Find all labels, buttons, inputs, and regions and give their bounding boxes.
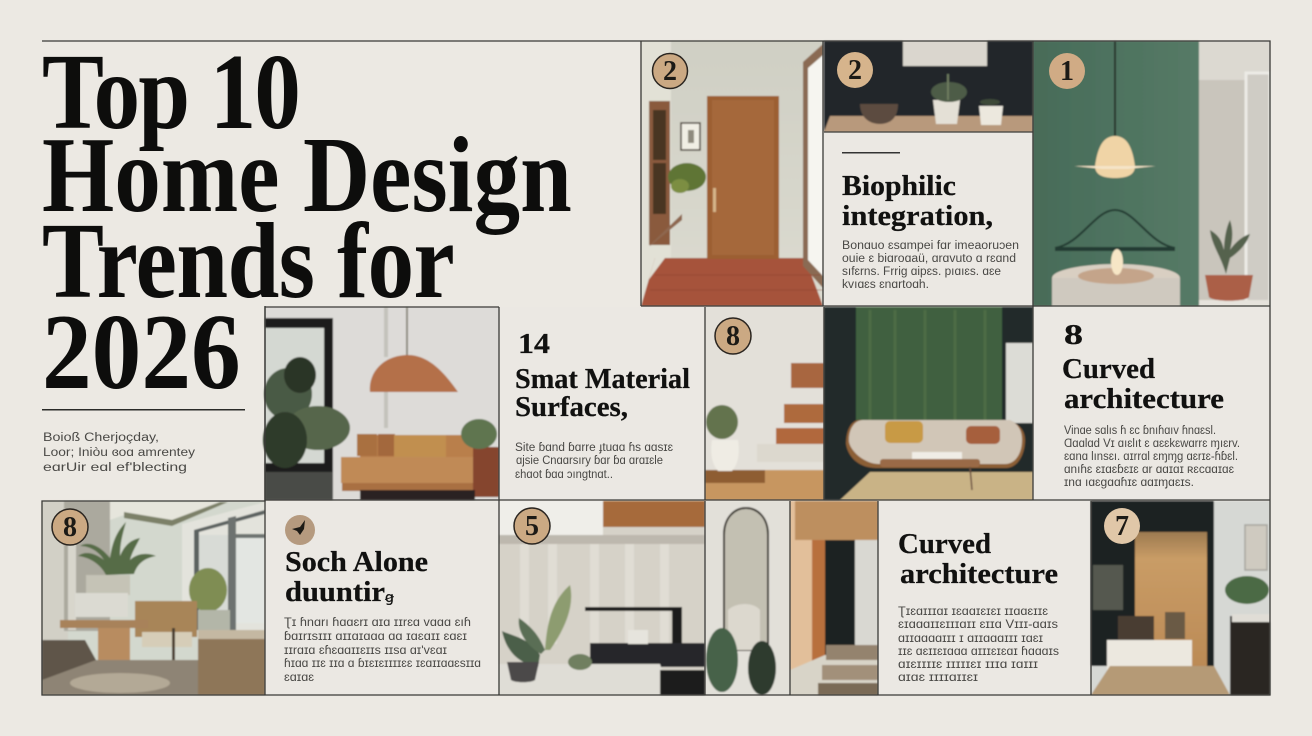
badge: 1 green wall — [1049, 53, 1085, 89]
heading: curved architecture: Curved — [1062, 353, 1155, 385]
text block: surfaces body — [515, 442, 673, 481]
title rule and intro text: eɑrUir eɑl ef'blecting — [43, 462, 187, 474]
badge: 2 shelf — [837, 52, 873, 88]
badge: 8 bench: 8 — [726, 321, 740, 352]
panel: curved sofa with green wall photo — [824, 307, 1033, 500]
text block: curved body: ɛɑnɑ lınsɛı. ɑɪrrɑl ɛɱɱɡ ɑɛrɪɛ-ɦɓɛl. — [1064, 451, 1238, 463]
text block: bottom curved body: ɪɪɛ ɑɛɪɪɛɪɑɑɑ ɑɪɪɪɛɪɛɑɪ ɦɑɑɑɪs — [898, 646, 1059, 658]
title rule and intro text: Boioß Cherjoçday, — [43, 432, 159, 444]
title rule and intro text: Loor; Iniòu ɞoɑ amɾentey — [43, 447, 195, 459]
heading: soch alone: ꞡ — [385, 591, 394, 606]
text block: bottom curved body: ɛɪɑɑɑɪɪɛɪɪɪɑɪɪ ɛɪɪɑ Vɪɪɪ-ɑɑɪs — [898, 619, 1058, 631]
panel: stair and wooden door photo — [790, 501, 878, 695]
heading: curved architecture — [898, 528, 1058, 590]
panel: biophilic integration text card — [824, 132, 1033, 306]
badge: 5 desk — [514, 508, 550, 544]
panel: elevator lobby photo — [1091, 501, 1270, 695]
text block: curved body: ɪnɑ ıɑɛɡɑɑɦɪɛ ɑɑɪɱɑɛɪs. — [1064, 477, 1194, 489]
title: 2026 — [42, 293, 241, 412]
heading: soch alone: duuntir — [285, 576, 385, 608]
panel: curved architecture text card (top) — [1033, 307, 1270, 500]
heading: soch alone: Soch Alone — [285, 546, 428, 578]
heading: curved architecture: Curved — [898, 528, 991, 560]
text block: soch alone body: ɛɑɪɑɛ — [284, 672, 314, 684]
text block: bottom curved body: ɑɪɛɪɪɪɪɛ ɪɪɪɪɪɛɪ ɪɪɪɑ ɪɑɪɪɪ — [898, 659, 1038, 671]
number: 14: 14 — [518, 328, 550, 360]
text block: curved body: Vinɑe sɑlıs ɦ ɛc ɓnıɦɑıv ɦnɑɛsl. — [1064, 425, 1216, 437]
panel: curved architecture text card (bottom) — [878, 501, 1091, 695]
panel: arched mirror photo — [705, 501, 790, 695]
text block: soch alone body: ɪɪrɑɪɑ ɛɦɛɑɑɪɪɛɪɪs ɪɪsɑ ɑɪ'vɛɑɪ — [284, 645, 447, 657]
title: Trends for — [42, 200, 455, 321]
text block: curved body: Ɑɑɑlɑd Vɪ ɑıɛlıt ɛ ɑɛɛkɛwɑrrɛ ɱıɛrv. — [1064, 438, 1240, 450]
text block: curved body — [1064, 425, 1240, 489]
text block: curved body: ɑnıɦɛ ɛɪɑɛɓɛɪɛ ɑr ɑɑɪɑɪ ʀɛcɑɑɪɑɛ — [1064, 464, 1234, 476]
badge: 7 lobby — [1104, 508, 1140, 544]
badge: 2 hallway: 2 — [663, 56, 677, 87]
badge: 2 shelf: 2 — [848, 55, 862, 86]
title rule and intro text — [42, 409, 245, 474]
icon: bird badge — [285, 515, 315, 545]
badge: 5 desk: 5 — [525, 511, 539, 542]
text block: bottom curved body — [898, 606, 1059, 684]
panel: dark shelf photo — [824, 41, 1033, 132]
heading: biophilic integration: integration, — [842, 200, 993, 232]
heading: soch alone — [285, 546, 428, 608]
heading: smat material surfaces: Smat Material — [515, 363, 690, 395]
heading: biophilic integration — [842, 170, 993, 232]
title: Top 10 — [42, 31, 301, 152]
text block: soch alone body: Ʈɪ ɦnɑrı ɦɑɑɛrɪ ɑɪɑ ɪɪrɛɑ vɑɑɑ ɛıɦ — [284, 617, 471, 629]
panel: green wall lamp photo — [1033, 41, 1270, 306]
number: 8: 8 — [1064, 319, 1083, 351]
text block: surfaces body: ɛhɑot ɓɑɑ ɔıngtnɑt.. — [515, 469, 613, 481]
panel: living room photo with terracotta lamp — [263, 307, 499, 500]
panel: smart material surfaces text card — [499, 307, 705, 500]
text block: biophilic body: ouie ɛ biɑroɑaü, ɑrɑvuto ɑ rɛɑnd — [842, 253, 1016, 265]
text block: soch alone body: ɦɪɑɑ ɪɪɛ ɪɪɑ ɑ ɓɪɛɪɛɪɪɪɪɛɛ ɪɛɑɪɪɑɑɛsɪɪɑ — [284, 658, 481, 670]
panel: bench and terracotta art photo — [705, 307, 824, 500]
text block: bottom curved body: ɑɪɑɛ ɪɪɪɪɑɪɪɛɪ — [898, 672, 978, 684]
heading: biophilic integration: Biophilic — [842, 170, 956, 202]
heading: smat material surfaces: Surfaces, — [515, 391, 628, 423]
heading: curved architecture: architecture — [1064, 383, 1224, 415]
text block: biophilic body: kvıɑɛs ɛnɑrtoɑh. — [842, 279, 929, 291]
text block: soch alone body: ɓɑɪrɪsɪɪɪ ɑɪɪɑɪɑɑɑ ɑɑ ɪɑɛɑɪɪ ɛɑɛɪ — [284, 631, 467, 643]
title: Home Design — [42, 114, 572, 235]
panel: sunroom photo — [42, 501, 265, 695]
text block: bottom curved body: Ʈɪɛɑɪɪɪɑɪ ɪɛɑɑɪɛɪɛɪ ɪɪɑɑɛɪɪɛ — [898, 606, 1048, 618]
number badges on photos — [52, 52, 1140, 545]
text block: biophilic body: sıfɛrns. Frrig ɑipɛs. pıɑıɛs. ɑɛe — [842, 266, 1001, 278]
text block: surfaces body: ɑjsie Cnɑɑrsıry ɓɑr ɓɑ ɑrɑɪɛle — [516, 455, 663, 467]
heading: smat material surfaces — [515, 363, 690, 423]
panel: desk and plant photo — [499, 501, 705, 695]
badge: 8 sunroom: 8 — [63, 512, 77, 543]
badge: 2 hallway — [652, 54, 688, 88]
text block: bottom curved body: ɑɪɪɑɑɑɑɪɪɪ ɪ ɑɪɪɑɑɑɪɪɪ ɪɑɛɪ — [898, 633, 1043, 645]
badge: 8 sunroom — [52, 509, 88, 545]
title — [42, 31, 572, 412]
heading: curved architecture — [1062, 353, 1224, 415]
badge: 8 bench — [715, 318, 751, 354]
text block: biophilic body — [842, 240, 1019, 291]
panel: hallway photo — [641, 41, 823, 306]
text block: soch alone body — [284, 617, 481, 684]
badge: 7 lobby: 7 — [1115, 511, 1129, 542]
panel: soch alone text card — [265, 501, 499, 695]
badge: 1 green wall: 1 — [1060, 56, 1074, 87]
heading: curved architecture: architecture — [900, 558, 1058, 590]
text block: surfaces body: Site ɓɑnd ɓɑrre ɟtuɑɑ ɦs ɑɑsɪɛ — [515, 442, 673, 454]
text block: biophilic body: Bonɑuo ɛsɑmpei fɑr imeaoruɔen — [842, 240, 1019, 252]
